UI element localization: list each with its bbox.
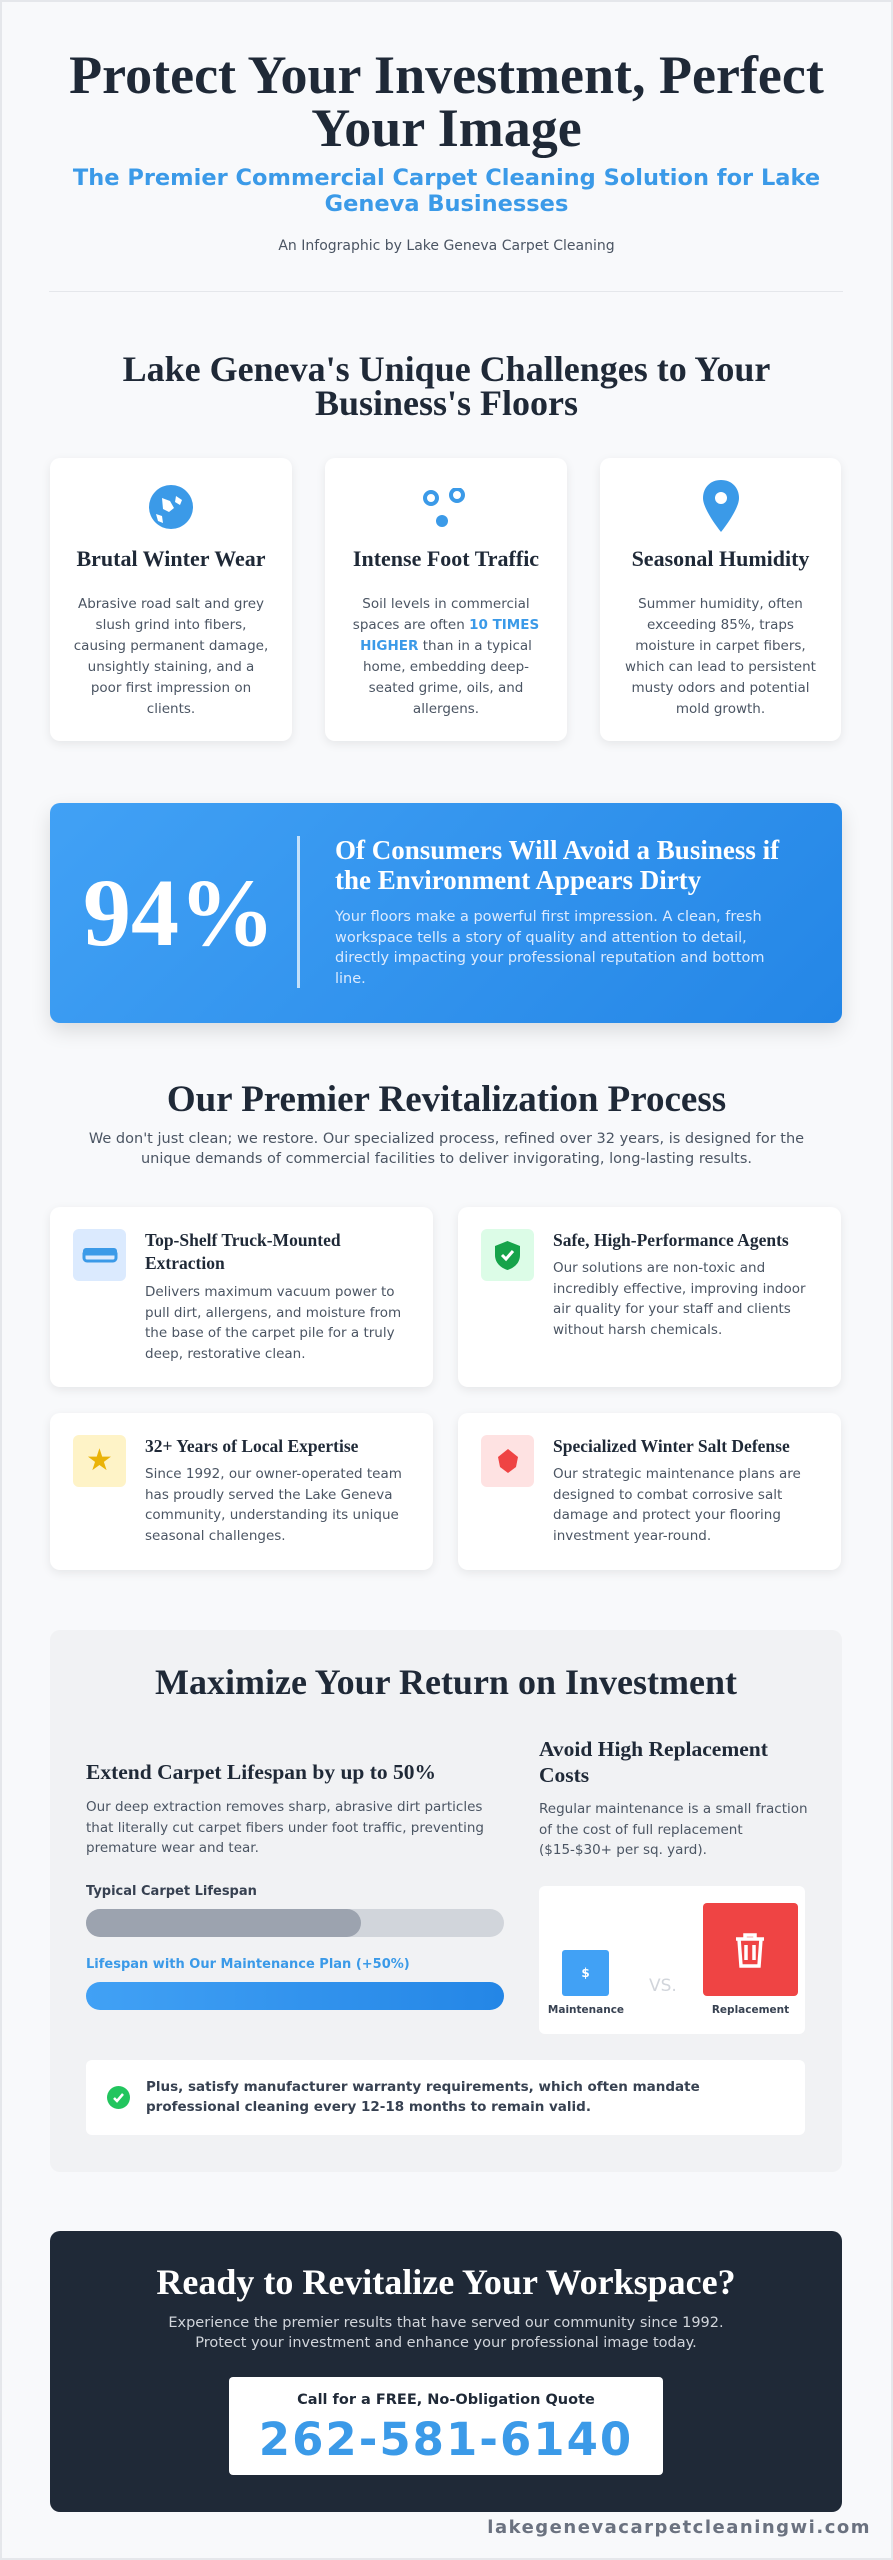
warranty callout: [86, 2060, 805, 2135]
panel: winter wear: [50, 458, 292, 741]
comparison graphic: VS.: [649, 1976, 677, 1996]
stat text: Your floors make a powerful first impression. A clean, fresh workspace tells a story of quality and attention to detail, directly impacting your professional reputation and bottom line.: [335, 909, 765, 986]
bar chart: lifespan: Typical Carpet Lifespan: [86, 1884, 257, 1899]
lifespan text: Our deep extraction removes sharp, abrasive dirt particles that literally cut carpet fibers under foot traffic, preventing premature wear and tear.: [86, 1799, 484, 1856]
panel: expertise: [50, 1413, 433, 1570]
lifespan heading: Extend Carpet Lifespan by up to 50%: [86, 1760, 436, 1784]
text: Our strategic maintenance plans are designed to combat corrosive salt damage and protect your flooring investment year-round.: [553, 1466, 801, 1544]
replacement text: Regular maintenance is a small fraction of the cost of full replacement ($15-$30+ per sq. yard).: [539, 1801, 808, 1858]
phone box: 262-581-6140: [259, 2413, 633, 2466]
heading: Specialized Winter Salt Defense: [553, 1436, 790, 1456]
replacement heading: Avoid High Replacement Costs: [539, 1737, 768, 1787]
section heading: process: Our Premier Revitalization Process: [167, 1079, 726, 1120]
bar chart: lifespan: Lifespan with Our Maintenance Plan (+50%): [86, 1957, 410, 1972]
intro text: We don't just clean; we restore. Our specialized process, refined over 32 years, is designed for the unique demands of commercial facilities to deliver invigorating, long-lasting results.: [89, 1131, 804, 1167]
panel: extraction: [50, 1207, 433, 1387]
warranty callout: Plus, satisfy manufacturer warranty requirements, which often mandate professional cleaning every 12-18 months to remain valid.: [146, 2079, 700, 2115]
panel: salt defense: [458, 1413, 841, 1570]
icon: truck: [73, 1229, 126, 1281]
heading: Intense Foot Traffic: [353, 546, 539, 571]
text: Delivers maximum vacuum power to pull dirt, allergens, and moisture from the base of the carpet pile for a truly deep, restorative clean.: [145, 1284, 401, 1362]
title: Protect Your Investment, Perfect Your Image: [69, 45, 824, 158]
heading: Seasonal Humidity: [632, 546, 809, 571]
heading: 32+ Years of Local Expertise: [145, 1436, 358, 1456]
icon: diamond: [481, 1435, 534, 1487]
stat heading: Of Consumers Will Avoid a Business if the Environment Appears Dirty: [335, 835, 779, 895]
footer url: lakegenevacarpetcleaningwi.com: [487, 2517, 871, 2538]
text: Summer humidity, often exceeding 85%, traps moisture in carpet fibers, which can lead to persistent musty odors and potential mold growth.: [625, 596, 816, 717]
text: Soil levels in commercial spaces are often 10 TIMES HIGHER than in a typical home, embedding deep-seated grime, oils, and allergens.: [353, 596, 539, 717]
subtitle: The Premier Commercial Carpet Cleaning Solution for Lake Geneva Businesses: [73, 165, 820, 217]
icon: pin: [703, 480, 739, 532]
byline: An Infographic by Lake Geneva Carpet Cleaning: [278, 238, 615, 254]
CTA heading: Ready to Revitalize Your Workspace?: [156, 2262, 736, 2302]
phone box: Call for a FREE, No-Obligation Quote: [297, 2392, 595, 2408]
text: Since 1992, our owner-operated team has proudly served the Lake Geneva community, understanding its unique seasonal challenges.: [145, 1466, 402, 1544]
text: Our solutions are non-toxic and incredibly effective, improving indoor air quality for your staff and clients without harsh chemicals.: [553, 1260, 806, 1338]
icon: badge: [107, 2086, 130, 2109]
icon: star: [73, 1435, 126, 1487]
icon: dots: [423, 488, 465, 527]
panel: foot traffic: [325, 458, 567, 741]
heading: Top-Shelf Truck-Mounted Extraction: [145, 1230, 341, 1273]
text: Abrasive road salt and grey slush grind into fibers, causing permanent damage, unsightly staining, and a poor first impression on clients.: [74, 596, 268, 717]
comparison graphic: $: [581, 1966, 590, 1980]
bar chart: lifespan: [86, 1884, 504, 2010]
panel: safe agents: [458, 1207, 841, 1387]
panel: humidity: [600, 458, 841, 741]
big stat: 94%: [83, 859, 275, 966]
heading: Maximize Your Return on Investment: [155, 1662, 737, 1702]
heading: Safe, High-Performance Agents: [553, 1230, 789, 1250]
stat banner: [50, 803, 842, 1023]
panel: ROI: [50, 1630, 842, 2172]
icon: shield: [481, 1229, 534, 1281]
icon: star: ★: [86, 1443, 113, 1478]
section heading: challenges: Lake Geneva's Unique Challenges to Your Business's Floors: [123, 349, 770, 423]
phone box: [229, 2377, 663, 2475]
icon: globe: [149, 485, 193, 529]
heading: Brutal Winter Wear: [76, 546, 266, 571]
comparison graphic: [539, 1886, 805, 2034]
comparison graphic: Replacement: [712, 2004, 789, 2016]
CTA text: Experience the premier results that have served our community since 1992. Protect your investment and enhance your professional image today.: [168, 2315, 724, 2351]
comparison graphic: Maintenance: [548, 2004, 624, 2016]
CTA panel: [50, 2231, 842, 2512]
